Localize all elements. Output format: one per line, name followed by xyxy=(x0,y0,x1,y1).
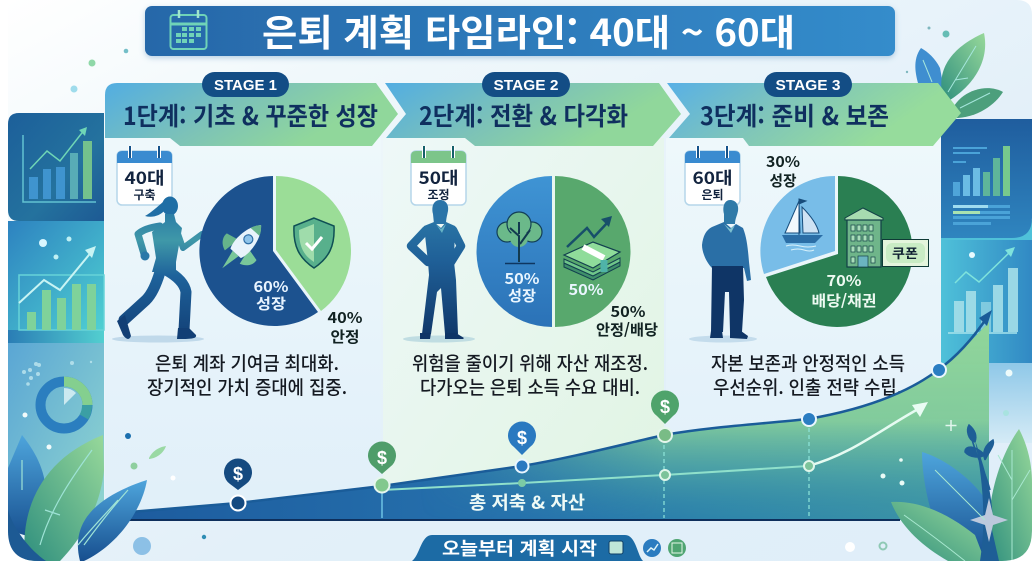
calendar: 60대 은퇴: 60대 xyxy=(692,164,732,189)
pie chart: stage 2: 50% xyxy=(504,268,540,289)
pin: dollar 1: $ xyxy=(233,464,243,484)
pie chart: stage 3: 쿠폰 xyxy=(892,243,918,262)
pie chart: stage 3 xyxy=(760,176,929,327)
decorative dots top xyxy=(70,26,950,92)
button: start planning today xyxy=(412,535,643,561)
title: 은퇴 계획 타임라인: 40대 ~ 60대 xyxy=(262,3,795,57)
pin: dollar 2: $ xyxy=(377,448,387,468)
stage 2 banner: 2단계: 전환 & 다각화 xyxy=(419,97,628,133)
donut chart icon xyxy=(40,382,88,428)
panel: stage 2 column xyxy=(383,138,664,520)
label: 50% 안정/배당: 안정/배당 xyxy=(596,319,658,340)
stage 1 banner: 1단계: 기초 & 꾸준한 성장 xyxy=(123,97,378,133)
text: stage 2 description: 다가오는 은퇴 소득 수요 대비. xyxy=(420,373,640,400)
stage 1 banner: STAGE 1 xyxy=(214,77,277,94)
label: 50% 안정/배당: 50% xyxy=(610,301,646,322)
figure: older man xyxy=(689,200,757,342)
label: 50% 안정/배당 xyxy=(596,301,658,340)
text: stage 1 description: 은퇴 계좌 기여금 최대화. xyxy=(155,349,339,376)
text: stage 2 description xyxy=(412,349,648,400)
stage 3 banner: STAGE 3 xyxy=(776,77,840,94)
text: stage 1 description xyxy=(147,349,347,400)
timeline nodes xyxy=(230,363,946,510)
text: stage 3 description xyxy=(711,349,905,400)
label: total savings: 총 저축 & 자산 xyxy=(469,489,585,515)
text: stage 3 description: 자본 보존과 안정적인 소득 xyxy=(711,349,905,376)
pie chart: stage 1: 성장 xyxy=(256,293,286,314)
icon: leaves bottom right xyxy=(891,425,1032,561)
calendar: 40대 구축: 40대 xyxy=(124,164,164,189)
area chart: total savings and assets xyxy=(124,310,992,520)
calendar: 60대 은퇴: 은퇴 xyxy=(701,186,724,203)
title bar xyxy=(145,6,895,56)
calendar: 40대 구축 xyxy=(117,146,172,205)
icon: leaves bottom left xyxy=(8,435,147,561)
figure: man hands on hips xyxy=(403,200,475,342)
calendar: 60대 은퇴 xyxy=(685,146,740,205)
text: stage 2 description: 위험을 줄이기 위해 자산 재조정. xyxy=(412,349,648,376)
stage 1 banner xyxy=(105,72,398,146)
label: 30% 성장: 성장 xyxy=(770,170,797,191)
calendar: 50대 조정: 50대 xyxy=(418,164,458,189)
stage 3 banner: 3단계: 준비 & 보존 xyxy=(700,97,889,133)
stage 2 banner xyxy=(385,72,681,146)
text: stage 3 description: 우선순위. 인출 전략 수립. xyxy=(713,373,902,400)
stage 3 banner xyxy=(667,72,961,146)
panel: stage 1 column xyxy=(105,138,381,520)
pie chart: stage 2 xyxy=(476,176,630,327)
pie chart: stage 3: 70% xyxy=(826,270,862,291)
button: start planning today: 오늘부터 계획 시작 xyxy=(442,535,597,561)
icon: title calendar xyxy=(170,10,206,49)
pin: dollar 3 xyxy=(508,422,536,455)
panel: right decorative charts xyxy=(941,119,1032,443)
pin: dollar 4 xyxy=(651,391,679,424)
calendar: 40대 구축: 구축 xyxy=(133,186,156,203)
pie chart: stage 1: 60% xyxy=(254,276,288,297)
icon: leaves top right xyxy=(915,33,1003,118)
pin: dollar 3: $ xyxy=(517,428,527,448)
pin: dollar 4: $ xyxy=(660,397,670,417)
pie chart: stage 2: 50% xyxy=(568,279,604,300)
panel: stage 3 column xyxy=(666,138,941,520)
pin: dollar 1 xyxy=(224,459,252,490)
text: stage 1 description: 장기적인 가치 증대에 집중. xyxy=(147,373,347,400)
pin: dollar 2 xyxy=(368,442,396,474)
icon: small chart badge xyxy=(643,539,661,557)
pie chart: stage 3: 배당/채권 xyxy=(812,290,876,311)
label: 30% 성장: 30% xyxy=(766,151,800,172)
label: 40% 안정: 안정 xyxy=(330,326,360,347)
pie chart: stage 1 xyxy=(199,176,351,326)
decorative dots bottom left xyxy=(22,412,206,555)
pie chart: stage 2: 성장 xyxy=(508,285,536,306)
calendar: 50대 조정: 조정 xyxy=(427,186,450,203)
icon: small document badge xyxy=(668,539,686,557)
decorative sparkles right xyxy=(845,370,1012,552)
panel: left decorative charts xyxy=(8,113,104,533)
calendar: 50대 조정 xyxy=(411,146,466,205)
label: 40% 안정 xyxy=(328,307,362,347)
stage 2 banner: STAGE 2 xyxy=(494,77,558,94)
label: 30% 성장 xyxy=(766,151,800,191)
label: 40% 안정: 40% xyxy=(328,307,362,328)
figure: runner xyxy=(112,196,204,342)
